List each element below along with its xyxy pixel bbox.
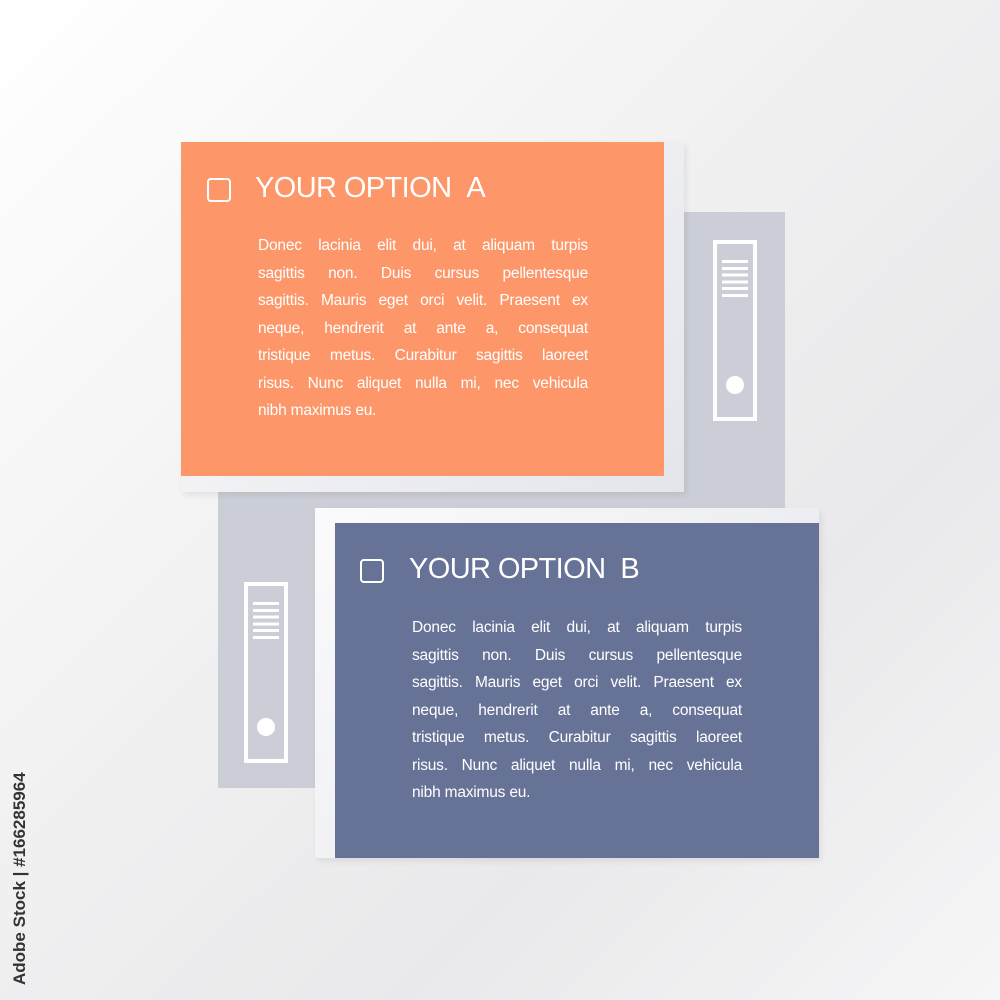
text block B: sagittis non. Duis cursus pellentesque bbox=[412, 646, 742, 664]
heading B: YOUR OPTION B bbox=[409, 553, 639, 585]
icon: checkbox A bbox=[207, 178, 231, 202]
tray B bbox=[315, 508, 819, 858]
heading A: YOUR OPTION A bbox=[255, 172, 485, 204]
text block A: neque, hendrerit at ante a, consequat bbox=[258, 320, 588, 336]
text block B: tristique metus. Curabitur sagittis laoreet bbox=[412, 729, 742, 746]
text block A: sagittis non. Duis cursus pellentesque bbox=[258, 264, 588, 282]
gray background panel bbox=[218, 212, 785, 788]
text block B: neque, hendrerit at ante a, consequat bbox=[412, 702, 742, 718]
text block A: nibh maximus eu. bbox=[258, 402, 376, 419]
watermark id: Adobe Stock | #166285964 bbox=[10, 772, 29, 985]
icon: binder B bbox=[244, 582, 288, 763]
text block B: risus. Nunc aliquet nulla mi, nec vehicula bbox=[412, 756, 742, 774]
text block A: Donec lacinia elit dui, at aliquam turpis bbox=[258, 237, 588, 254]
text block A: risus. Nunc aliquet nulla mi, nec vehicula bbox=[258, 374, 588, 392]
text block B: sagittis. Mauris eget orci velit. Praesent ex bbox=[412, 674, 742, 691]
tray A bbox=[181, 142, 684, 492]
panel: option A bbox=[181, 142, 664, 476]
icon: checkbox B bbox=[360, 559, 384, 583]
text block B bbox=[412, 619, 742, 801]
text block A: tristique metus. Curabitur sagittis laoreet bbox=[258, 347, 588, 364]
text block A bbox=[258, 237, 588, 419]
icon: binder A bbox=[713, 240, 757, 421]
text block A: sagittis. Mauris eget orci velit. Praesent ex bbox=[258, 292, 588, 309]
panel: option B bbox=[335, 523, 819, 858]
text block B: nibh maximus eu. bbox=[412, 784, 530, 801]
text block B: Donec lacinia elit dui, at aliquam turpis bbox=[412, 619, 742, 636]
